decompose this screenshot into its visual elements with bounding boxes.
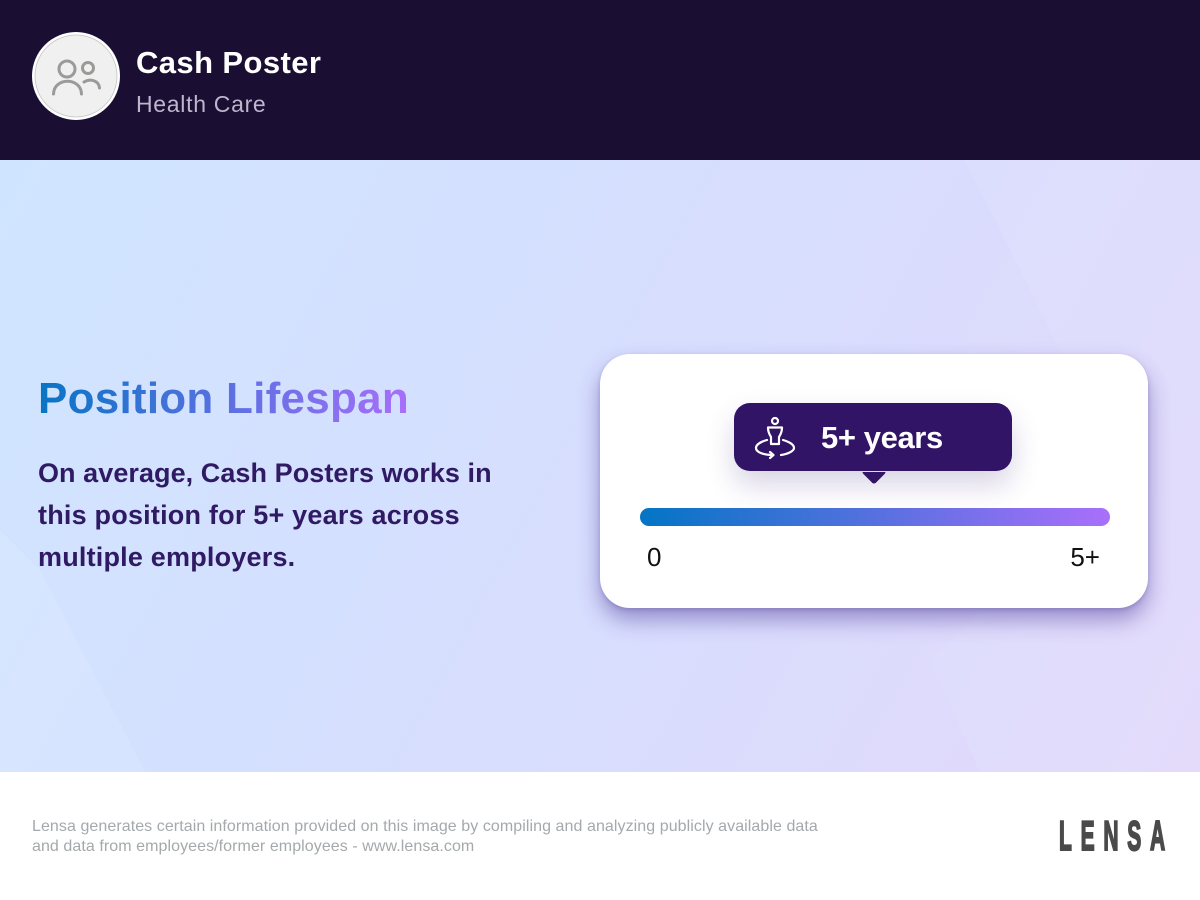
gradient bar: [640, 508, 1110, 526]
main gradient panel: [0, 160, 1200, 772]
disclaimer text: [32, 818, 818, 855]
footer band: [0, 772, 1200, 900]
heading: Position Lifespan: [38, 374, 409, 423]
axis maximum: 5+: [1070, 542, 1100, 572]
icon: people avatar: [32, 32, 120, 120]
axis minimum: 0: [647, 542, 661, 572]
description text: this position for 5+ years across: [38, 500, 460, 530]
disclaimer text: Lensa generates certain information provided on this image by compiling and analyzing publicly available data: [32, 818, 818, 835]
description text: On average, Cash Posters works in: [38, 458, 492, 488]
description text: [38, 458, 492, 572]
job title: Cash Poster: [136, 45, 321, 80]
industry: Health Care: [136, 91, 266, 117]
header band: [0, 0, 1200, 160]
panel: lifespan card: [600, 354, 1148, 608]
tooltip: 5+ years: [734, 403, 1012, 471]
background facets: [0, 160, 1200, 772]
description text: multiple employers.: [38, 542, 295, 572]
disclaimer text: and data from employees/former employees - www.lensa.com: [32, 838, 474, 855]
tooltip pointer: [862, 472, 886, 484]
duration value: 5+ years: [821, 420, 943, 455]
logo: LENSA: LENSA: [1059, 812, 1174, 859]
icon: person on rotation: [754, 416, 796, 460]
